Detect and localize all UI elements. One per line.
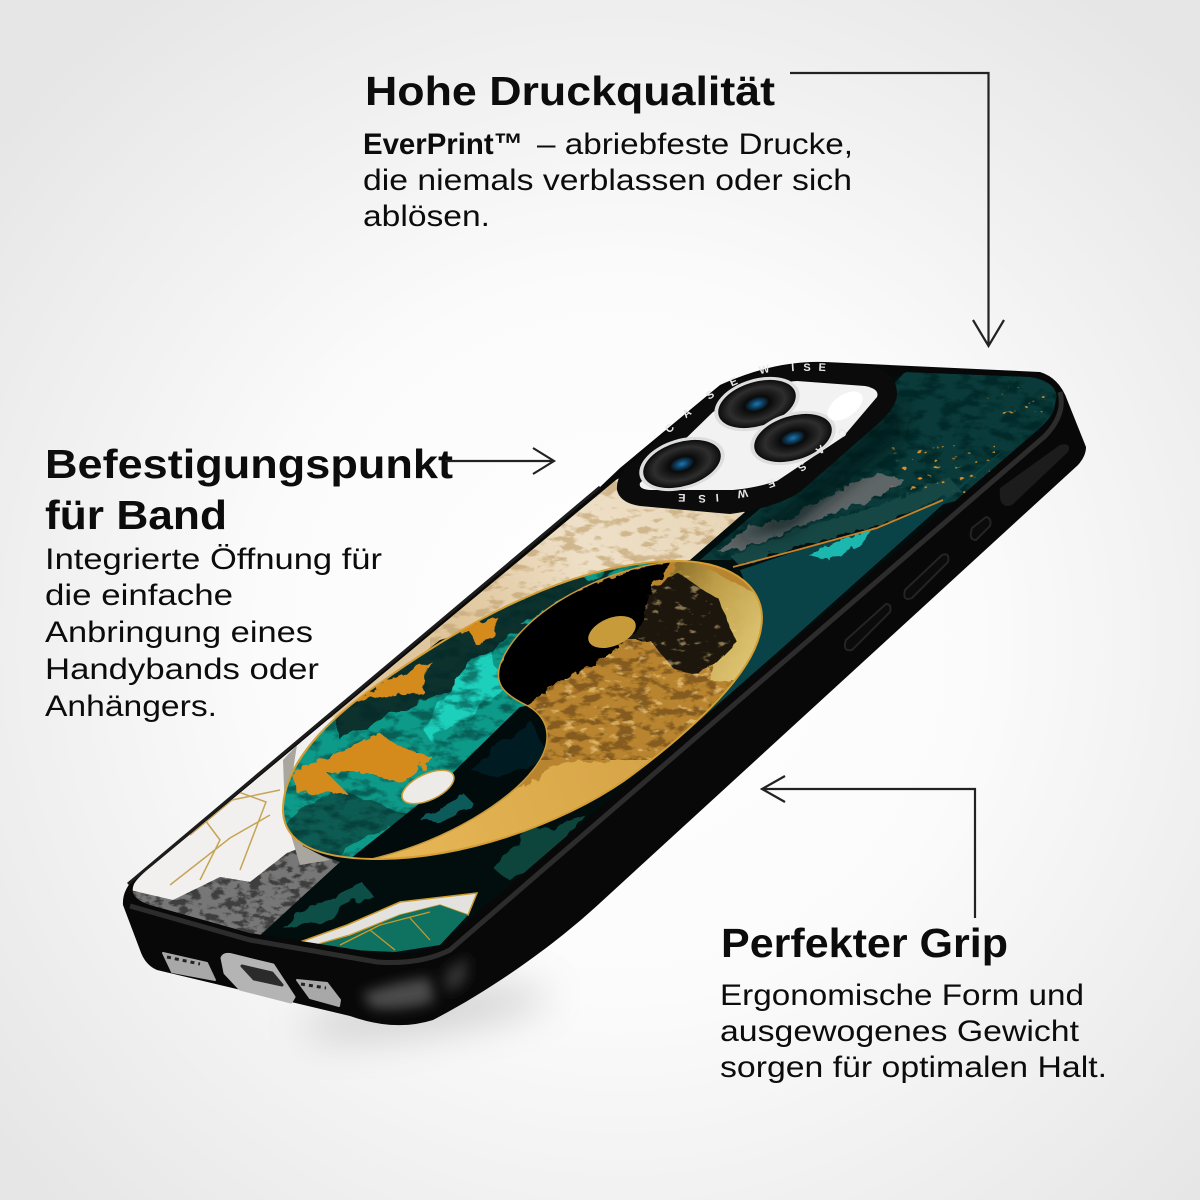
marble: lower dark teal (280, 885, 372, 925)
marble: deep teal (700, 440, 1015, 720)
black night sky (499, 562, 670, 706)
marbling (284, 562, 658, 857)
heading and text: Hohe Druckqualität (363, 68, 853, 233)
brand text: E (678, 491, 686, 503)
brand text: S (795, 459, 808, 473)
dark rock (620, 575, 735, 675)
shadow under phone (298, 975, 552, 1049)
usb hole (242, 966, 282, 985)
body text: Ergonomische Form und (720, 979, 1084, 1012)
dark bands (336, 569, 619, 739)
body text: EverPrint™ (363, 128, 523, 161)
shadow of island (730, 400, 905, 540)
flash (822, 386, 868, 426)
marble: bright teal accent (808, 528, 877, 560)
brand text: S (698, 492, 706, 504)
teal lobe (284, 562, 659, 857)
mountain texture (532, 639, 732, 760)
body text (45, 543, 382, 723)
bottom ports (163, 953, 340, 1006)
heading (45, 441, 453, 538)
body text: die niemals verblassen oder sich (363, 164, 852, 197)
strap slot (1000, 444, 1069, 506)
lens left (633, 427, 731, 501)
printed back (120, 360, 1070, 960)
brand text: A (813, 442, 827, 457)
body text: sorgen für optimalen Halt. (720, 1051, 1107, 1084)
body text: die einfache (45, 579, 233, 612)
body text: Anbringung eines (45, 616, 313, 649)
marble: upper teal (700, 372, 1060, 560)
brand text: S (704, 388, 717, 402)
body text (363, 128, 853, 233)
body text: Handybands oder (45, 653, 319, 686)
case body (123, 362, 1086, 1025)
heading: für Band (45, 492, 227, 538)
brand text (663, 362, 849, 504)
marble: grey band (718, 473, 905, 552)
arrow: grip (762, 776, 975, 918)
brand text: W (736, 486, 749, 500)
phone (120, 360, 1086, 1025)
heading: Perfekter Grip (721, 920, 1008, 966)
arrow: print quality (790, 73, 1004, 346)
marble: cream (280, 470, 745, 750)
brand text: W (758, 363, 771, 377)
speaker right (297, 980, 340, 1006)
brand text: C (663, 422, 677, 436)
corner highlight (362, 956, 468, 1009)
orange blotches (290, 617, 497, 793)
brand text: I (715, 491, 719, 503)
marble: lower teal (305, 905, 468, 952)
usb port (222, 954, 294, 1002)
brand text: C (835, 425, 849, 439)
left edge line (128, 487, 600, 884)
rim ridge (130, 392, 1061, 962)
window (640, 381, 878, 490)
body text: ausgewogenes Gewicht (720, 1015, 1080, 1048)
arrow: strap attachment (445, 448, 554, 474)
brand text: A (680, 406, 694, 421)
brand text: E (728, 375, 740, 389)
moon (588, 616, 636, 648)
heading and text: Perfekter Grip (720, 920, 1107, 1084)
brand text: E (818, 362, 826, 374)
brand text: I (791, 362, 795, 374)
frame (617, 363, 897, 514)
heading: Hohe Druckqualität (365, 68, 775, 114)
side buttons (845, 517, 990, 650)
base colour (120, 360, 1070, 960)
lens right (744, 401, 842, 475)
outline (283, 561, 762, 859)
marble: white gold vein (300, 893, 477, 945)
gold rim (670, 562, 761, 682)
s curve line (372, 561, 680, 859)
brand text: S (803, 362, 811, 374)
heading: Befestigungspunkt (45, 441, 453, 487)
yin yang (270, 550, 770, 870)
gold vein (733, 500, 943, 567)
pale gold crescent (372, 760, 660, 865)
body text: ablösen. (363, 200, 490, 233)
bright teal (425, 650, 505, 740)
white dot (401, 770, 455, 804)
black lower band (352, 706, 546, 858)
lens top (708, 367, 806, 441)
body text: Anhängers. (45, 690, 217, 723)
body text: – abriebfeste Drucke, (537, 128, 853, 161)
body text (720, 979, 1107, 1084)
heading and text: Befestigungspunkt (45, 441, 453, 723)
orange speckles (890, 385, 1045, 495)
gold lobe (379, 562, 761, 858)
marble: grey lower left (130, 848, 340, 940)
body text: Integrierte Öffnung für (45, 543, 382, 576)
marble: white lower left (130, 715, 340, 902)
brand text: E (766, 476, 777, 490)
speaker left (163, 953, 215, 980)
camera island (617, 362, 905, 540)
